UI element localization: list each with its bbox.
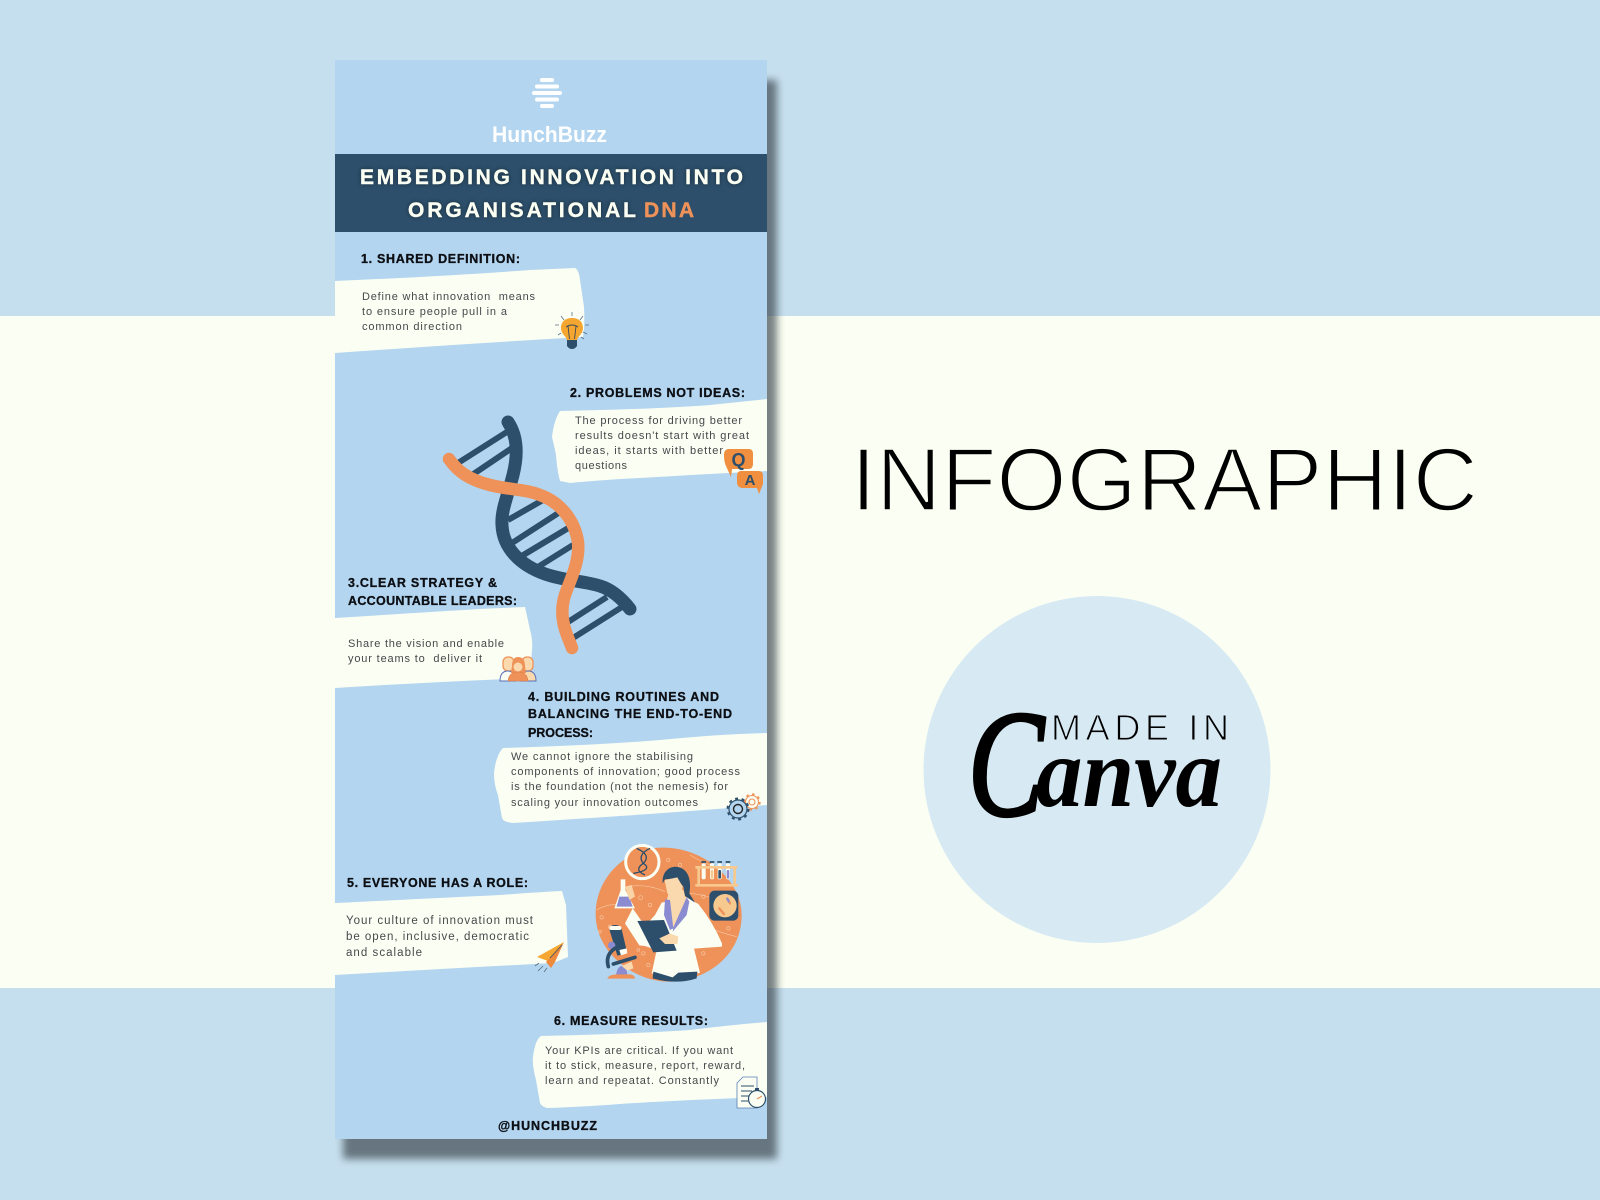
heading 5: 5. EVERYONE HAS A ROLE: bbox=[347, 876, 528, 890]
panel: step 4 card bbox=[494, 733, 767, 823]
step 4 text: We cannot ignore the stabilising bbox=[511, 751, 693, 763]
title banner bbox=[335, 154, 767, 232]
panel: step 3 card bbox=[335, 607, 532, 688]
step 1 text: to ensure people pull in a bbox=[362, 306, 508, 318]
background bottom band bbox=[0, 988, 1600, 1200]
trousers bbox=[653, 972, 697, 982]
microscope bbox=[607, 925, 635, 979]
Canva script wordmark: anva bbox=[1036, 717, 1222, 828]
heading 4: PROCESS: bbox=[528, 726, 593, 740]
flask bbox=[614, 879, 635, 908]
heading 1: 1. SHARED DEFINITION: bbox=[361, 252, 520, 266]
step 3 text: Share the vision and enable bbox=[348, 638, 504, 650]
DNA orange strand bbox=[449, 459, 578, 648]
petri dish bbox=[709, 891, 738, 921]
title line one: EMBEDDING INNOVATION INTO bbox=[360, 166, 743, 189]
heading 4: 4. BUILDING ROUTINES AND bbox=[528, 690, 719, 704]
title line two: ORGANISATIONAL bbox=[408, 199, 636, 222]
panel: step 2 card bbox=[552, 399, 767, 483]
step 2 text: ideas, it starts with better bbox=[575, 445, 723, 457]
background top band bbox=[0, 0, 1600, 316]
face bbox=[665, 877, 683, 897]
coat bbox=[625, 897, 722, 979]
step 3 text: your teams to deliver it bbox=[348, 653, 482, 665]
step 2 text: results doesn't start with great bbox=[575, 430, 749, 442]
icon: Q and A speech bubbles bbox=[724, 449, 763, 494]
title highlight DNA: DNA bbox=[644, 199, 694, 222]
tablet bbox=[637, 920, 677, 952]
step 1 text: Define what innovation means bbox=[362, 291, 536, 303]
heading 3: ACCOUNTABLE LEADERS: bbox=[348, 594, 517, 608]
step 5 text: Your culture of innovation must bbox=[346, 915, 534, 927]
step 3 text bbox=[348, 638, 504, 665]
step 4 text: scaling your innovation outcomes bbox=[511, 797, 698, 809]
step 6 text bbox=[545, 1045, 745, 1087]
heading 4 bbox=[528, 690, 732, 740]
logo wordmark: HunchBuzz bbox=[492, 122, 607, 147]
heading 4: BALANCING THE END-TO-END bbox=[528, 707, 732, 721]
DNA badge bbox=[626, 845, 659, 879]
background middle band bbox=[0, 316, 1600, 988]
DNA rungs bbox=[458, 430, 622, 638]
orange backdrop bbox=[596, 848, 742, 982]
Canva script wordmark: C bbox=[968, 680, 1045, 848]
icon: Q and A speech bubbles: A bbox=[745, 472, 756, 489]
step 4 text: is the foundation (not the nemesis) for bbox=[511, 781, 728, 793]
heading 2: 2. PROBLEMS NOT IDEAS: bbox=[570, 386, 745, 400]
step 1 text: common direction bbox=[362, 321, 462, 333]
panel drop shadow bbox=[343, 80, 777, 1159]
panel: infographic poster bbox=[335, 60, 767, 1139]
panel: step 1 card bbox=[335, 268, 584, 353]
step 4 text: components of innovation; good process bbox=[511, 766, 740, 778]
step 2 text: questions bbox=[575, 460, 628, 472]
step 6 text: it to stick, measure, report, reward, bbox=[545, 1060, 745, 1072]
step 6 text: learn and repeatat. Constantly bbox=[545, 1075, 720, 1087]
backdrop squiggles bbox=[597, 855, 737, 937]
icon: light bulb bbox=[555, 312, 589, 349]
icon: Q and A speech bubbles: Q bbox=[731, 450, 746, 470]
icon: HunchBuzz logo stripes bbox=[532, 78, 562, 108]
panel: step 6 card bbox=[533, 1022, 767, 1108]
hair and ponytail bbox=[663, 867, 695, 903]
step 5 text: be open, inclusive, democratic bbox=[346, 931, 529, 943]
badge: made in Canva bbox=[924, 596, 1270, 943]
step 4 text bbox=[511, 751, 740, 809]
heading 3 bbox=[348, 576, 517, 608]
hand bbox=[659, 933, 678, 944]
step 2 text: The process for driving better bbox=[575, 415, 742, 427]
step 6 text: Your KPIs are critical. If you want bbox=[545, 1045, 733, 1057]
step 5 text bbox=[346, 915, 534, 959]
heading 6: 6. MEASURE RESULTS: bbox=[554, 1014, 708, 1028]
heading 3: 3.CLEAR STRATEGY & bbox=[348, 576, 497, 590]
icon: gears bbox=[728, 794, 760, 820]
collar bbox=[664, 897, 689, 932]
step 5 text: and scalable bbox=[346, 947, 422, 959]
icon: paper plane bbox=[535, 942, 564, 972]
made in label: MADE IN bbox=[1051, 707, 1229, 748]
panel: step 5 card bbox=[335, 891, 568, 975]
step 1 text bbox=[362, 291, 536, 333]
test tube rack bbox=[695, 862, 738, 887]
heading: INFOGRAPHIC: INFOGRAPHIC bbox=[851, 430, 1478, 530]
footer handle: @HUNCHBUZZ bbox=[498, 1119, 597, 1133]
icon: team of people bbox=[500, 657, 536, 681]
illustration: scientist bbox=[596, 845, 742, 982]
icon: checklist and stopwatch bbox=[737, 1077, 766, 1108]
DNA dark strand bbox=[502, 422, 630, 609]
illustration: DNA helix bbox=[449, 422, 630, 648]
neck and chest bbox=[666, 890, 687, 928]
step 2 text bbox=[575, 415, 749, 472]
